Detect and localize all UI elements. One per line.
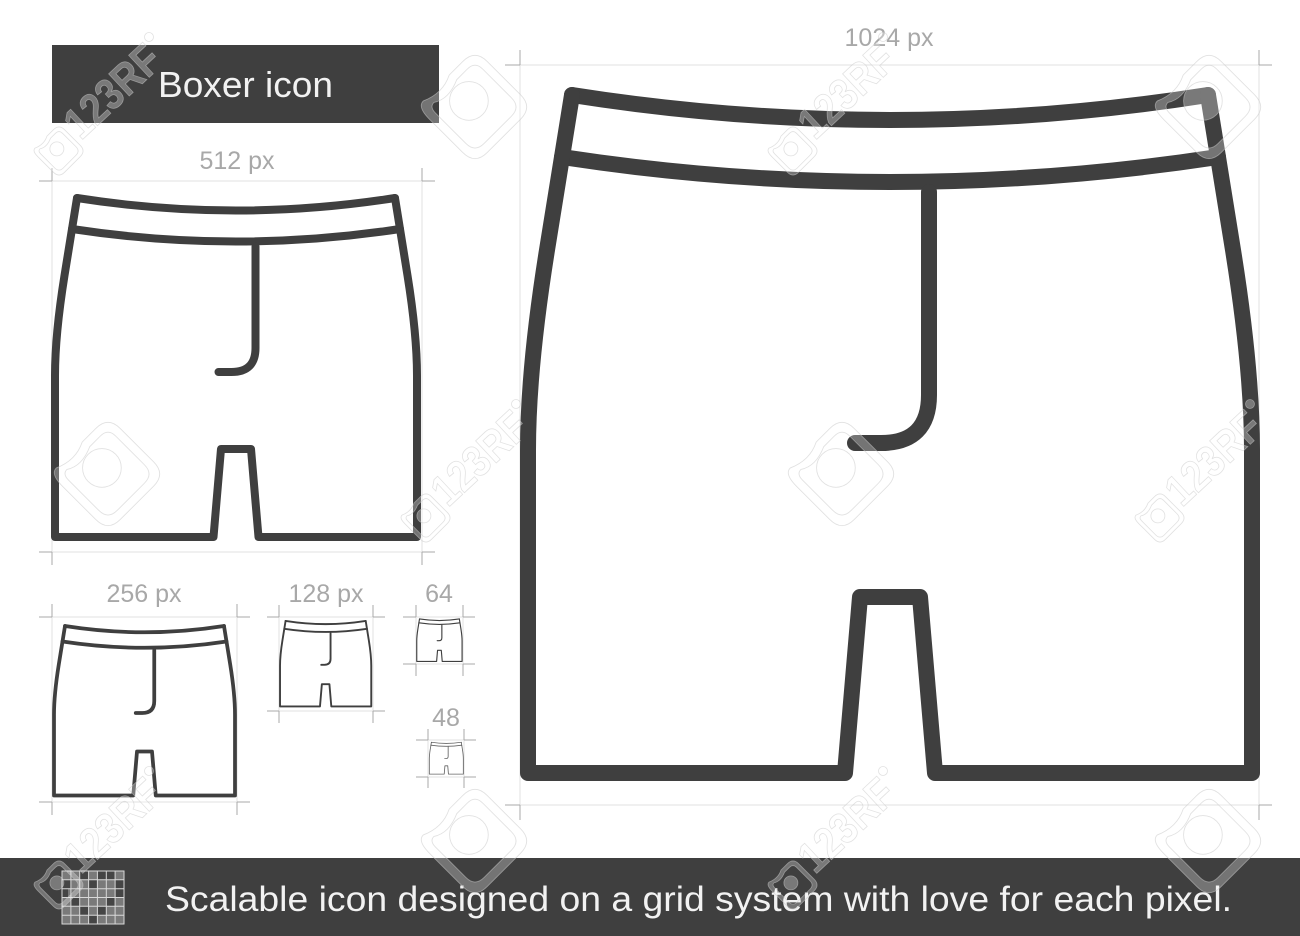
size guide: 512 px	[39, 147, 435, 565]
icon: pixel grid	[62, 871, 124, 924]
size guide: 256 px: 256 px	[106, 580, 182, 608]
title banner: Boxer icon	[158, 64, 333, 105]
watermark: 123RF stamps and wordmarks: 123RF	[421, 402, 538, 515]
boxer icon: 1024 px	[528, 95, 1252, 773]
watermark: 123RF stamps and wordmarks: 123RF	[788, 35, 905, 148]
size guide: 1024 px: 1024 px	[845, 24, 934, 52]
boxer icon: 48 px	[429, 742, 463, 774]
bottom banner	[0, 858, 1300, 936]
boxer icon: 128 px	[280, 621, 371, 706]
size guide: 128 px	[267, 580, 385, 723]
size guide: 512 px: 512 px	[199, 147, 275, 175]
boxer icon: 64 px	[417, 619, 462, 661]
size guide: 64 px	[403, 580, 475, 676]
watermark: 123RF stamps and wordmarks: 123RF	[54, 769, 171, 882]
watermark: 123RF stamps and wordmarks: 123RF	[788, 769, 905, 882]
boxer icon: 256 px	[54, 626, 235, 796]
size guide: 48 px: 48	[432, 704, 460, 732]
bottom banner: Scalable icon designed on a grid system with love for each pixel.	[165, 880, 1232, 919]
size guide: 256 px	[39, 580, 250, 815]
watermark: 123RF stamps and wordmarks: 123RF	[54, 35, 171, 148]
boxer icon: 512 px	[55, 198, 417, 537]
size guide: 48 px	[416, 704, 476, 788]
size guide: 128 px: 128 px	[288, 580, 364, 608]
title banner	[52, 45, 439, 123]
size guide: 64 px: 64	[425, 580, 453, 608]
watermark: 123RF stamps and wordmarks: 123RF	[1155, 402, 1272, 515]
